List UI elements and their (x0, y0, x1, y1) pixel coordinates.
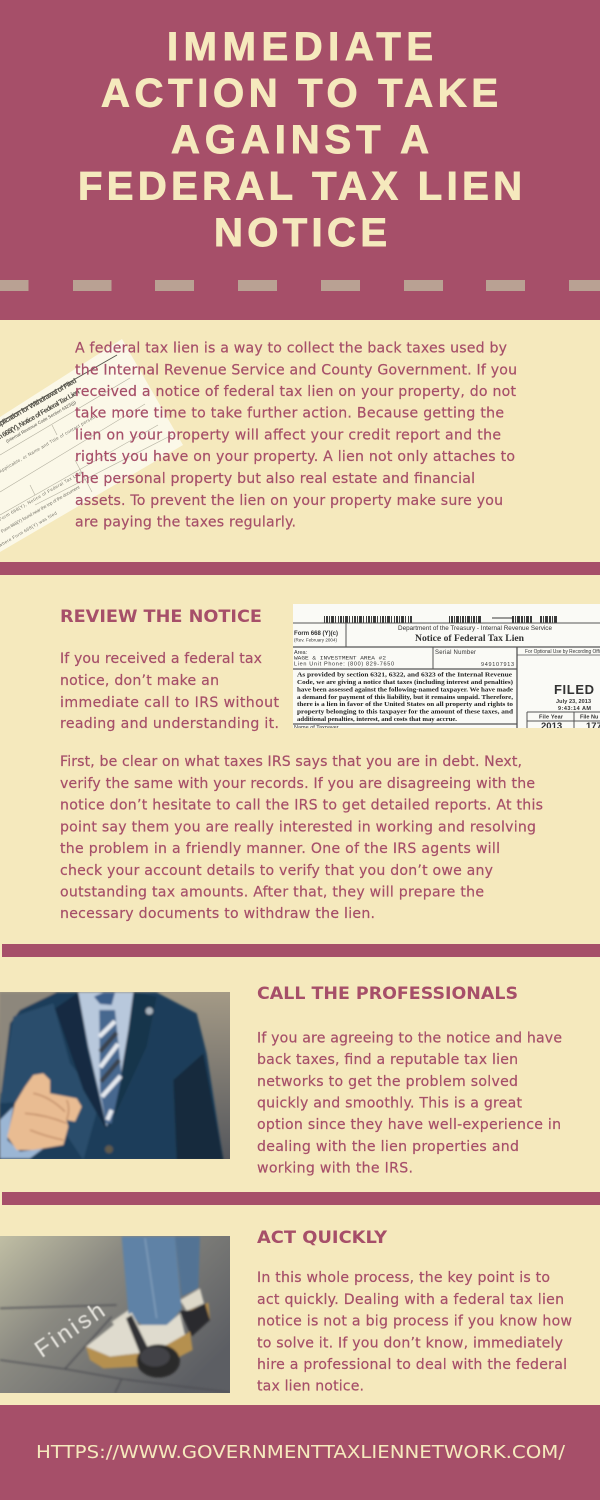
chalk word: Finish (30, 1297, 110, 1363)
professionals text: option since they have well-experience in (257, 1117, 561, 1133)
divider band 3 (2, 1192, 600, 1205)
form text: File Year (539, 714, 564, 720)
professionals text: networks to get the problem solved (257, 1074, 518, 1090)
divider band 2 (2, 944, 600, 957)
review body text: necessary documents to withdraw the lien. (60, 906, 375, 922)
form text: (Rev. February 2004) (294, 638, 338, 642)
intro paragraph (75, 340, 517, 530)
professionals text: If you are agreeing to the notice and have (257, 1030, 562, 1046)
intro paragraph: A federal tax lien is a way to collect the back taxes used by (75, 340, 507, 356)
professionals text: working with the IRS. (257, 1160, 413, 1176)
review body text: outstanding tax amounts. After that, they will prepare the (60, 884, 484, 900)
review body text: verify the same with your records. If you are disagreeing with the (60, 776, 535, 792)
form text: additional penalties, interest, and costs that may accrue. (297, 716, 457, 723)
form text: there is a lien in favor of the United States on all property and rights to (297, 701, 514, 708)
tilted tax form image: Form 668(Y) found near the top of the document (0, 484, 81, 534)
professionals text: quickly and smoothly. This is a great (257, 1096, 522, 1112)
act quickly text: notice is not a big process if you know how (257, 1314, 572, 1330)
form text: July 23, 2013 (556, 699, 591, 705)
form text: 949107913 (481, 662, 514, 668)
form text (294, 625, 600, 732)
section: review the notice (60, 604, 600, 922)
notice of federal tax lien form image (293, 604, 600, 732)
heading: call the professionals: CALL THE PROFESSIONALS (257, 984, 518, 1004)
form text: Lien Unit Phone: (800) 829-7650 (294, 662, 394, 668)
photo: businessman pointing (0, 992, 230, 1160)
intro paragraph: received a notice of federal tax lien on your property, do not (75, 384, 516, 400)
review lead text: notice, don’t make an (60, 673, 219, 689)
form text: As provided by section 6321, 6322, and 6323 of the Internal Revenue (297, 672, 512, 678)
form text: Name of Taxpayer (294, 725, 339, 731)
review body text (60, 754, 543, 922)
act quickly text: tax lien notice. (257, 1378, 364, 1394)
review lead text: reading and understanding it. (60, 716, 279, 732)
divider band 1 (0, 562, 600, 575)
professionals text (257, 1030, 562, 1176)
form text: Department of the Treasury - Internal Revenue Service (398, 625, 552, 632)
intro paragraph: take more time to take further action. Because getting the (75, 406, 504, 422)
review body text: First, be clear on what taxes IRS says that you are in debt. Next, (60, 754, 522, 770)
review body text: point say them you are really interested in working and resolving (60, 820, 536, 836)
review lead text: If you received a federal tax (60, 651, 262, 667)
title: AGAINST A (171, 118, 429, 162)
dashed divider (0, 280, 600, 291)
act quickly text: hire a professional to deal with the federal (257, 1357, 567, 1373)
title: NOTICE (214, 211, 387, 255)
tilted tax form image: Form 668(Y), Notice of Federal Tax Lien (0, 470, 83, 522)
form text: have been assessed against the following-named taxpayer. We have made (297, 686, 513, 694)
act quickly text: act quickly. Dealing with a federal tax lien (257, 1292, 564, 1308)
form text: Code, we are giving a notice that taxes (including interest and penalties) (297, 679, 513, 686)
form text: a demand for payment of this liability, but it remains unpaid. Therefore, (297, 694, 513, 701)
footer band (0, 1405, 600, 1500)
review lead text: immediate call to IRS without (60, 695, 279, 711)
act quickly text (257, 1270, 572, 1394)
tilted tax form image (0, 339, 183, 552)
form text: Form 668 (Y)(c) (294, 630, 338, 637)
header panel (0, 0, 600, 320)
form text: Serial Number (435, 650, 476, 656)
review body text: check your account details to verify that you don’t owe any (60, 863, 493, 879)
tilted tax form image: Applicable, or Name and Title of contact person (0, 414, 96, 474)
photo: sneakers at finish line (0, 1236, 230, 1393)
form text: WAGE & INVESTMENT AREA #2 (294, 654, 386, 662)
section: act quickly (0, 1228, 572, 1394)
title: IMMEDIATE (167, 25, 433, 69)
intro paragraph: the personal property but also real estate and financial (75, 471, 475, 487)
professionals text: dealing with the lien properties and (257, 1139, 519, 1155)
form text: Area: (294, 650, 308, 656)
professionals text: back taxes, find a reputable tax lien (257, 1052, 518, 1068)
heading: act quickly: ACT QUICKLY (257, 1228, 388, 1248)
form rules (293, 623, 600, 728)
form text: File Nu (580, 714, 598, 720)
title (78, 25, 522, 255)
form text: 2013 (541, 721, 562, 732)
tilted tax form image: (Internal Revenue Code Section 6323(j)) (5, 399, 77, 444)
act quickly text: In this whole process, the key point is to (257, 1270, 550, 1286)
intro paragraph: assets. To prevent the lien on your property make sure you (75, 493, 503, 509)
form text: FILED (554, 682, 594, 697)
intro paragraph: the Internal Revenue Service and County Government. If you (75, 362, 517, 378)
review lead text (60, 651, 279, 732)
review body text: the problem in a friendly manner. One of the IRS agents will (60, 841, 500, 857)
barcodes (324, 616, 558, 618)
intro paragraph: rights you have on your property. A lien not only attaches to (75, 449, 515, 465)
title: FEDERAL TAX LIEN (78, 164, 522, 208)
review body text: notice don’t hesitate to call the IRS to get detailed reports. At this (60, 798, 543, 814)
intro paragraph: lien on your property will affect your credit report and the (75, 427, 501, 443)
form text: 9:43:14 AM (558, 706, 591, 712)
form text: property belonging to this taxpayer for the amount of these taxes, and (297, 708, 513, 716)
website url: HTTPS://WWW.GOVERNMENTTAXLIENNETWORK.COM/ (36, 1443, 565, 1463)
title: ACTION TO TAKE (101, 72, 498, 116)
intro paragraph: are paying the taxes regularly. (75, 514, 296, 530)
section: call the professionals (0, 984, 562, 1176)
heading: review the notice: REVIEW THE NOTICE (60, 607, 262, 627)
form text: Notice of Federal Tax Lien (415, 634, 525, 644)
act quickly text: to solve it. If you don’t know, immediately (257, 1336, 563, 1352)
